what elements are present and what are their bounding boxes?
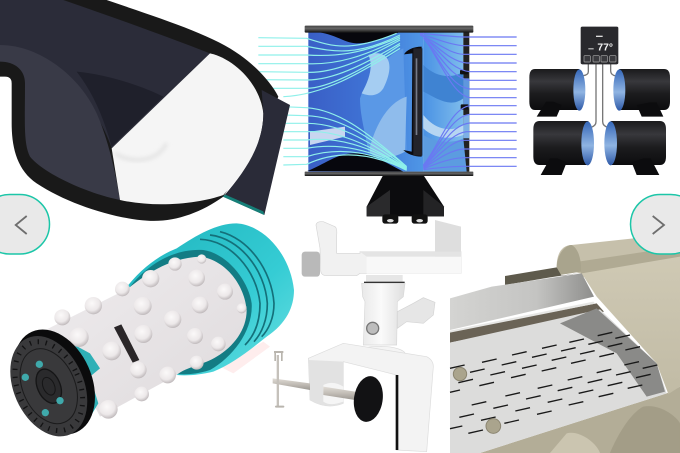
product: axial fan cutaway with airflow lines (258, 26, 517, 224)
clamp screw rod (273, 351, 355, 408)
pivot screw (367, 322, 379, 334)
dark mottled zone (560, 308, 665, 397)
white foam cup (112, 53, 263, 204)
left airflow lines (258, 33, 407, 170)
sleeve grooves (200, 232, 274, 345)
connecting cables (583, 63, 616, 128)
perforated plate (450, 309, 667, 453)
roof bolts (453, 367, 501, 433)
fan bottom right (604, 121, 666, 175)
pink reflection (220, 342, 270, 373)
black piped edge (0, 0, 278, 221)
clamp body (308, 343, 433, 452)
black knob (351, 374, 386, 424)
lower roof panel (480, 387, 680, 453)
dark mask body (0, 0, 210, 148)
teal trim (223, 195, 264, 215)
slot (114, 324, 139, 363)
product: metal roof vent detail (450, 233, 680, 453)
chevron right (653, 216, 664, 234)
mounting bracket (367, 176, 444, 224)
sleeve opening (130, 250, 252, 374)
pivot column (353, 275, 435, 362)
product: white phone clamp mount (273, 220, 461, 452)
end disk (0, 317, 111, 449)
product: sleep eye mask (0, 0, 290, 221)
fan panel interior (307, 32, 469, 172)
left lobe (0, 45, 120, 200)
teal sleeve (128, 223, 294, 375)
phone holder (302, 220, 461, 277)
foam shading (115, 143, 167, 160)
nav button: previous (0, 194, 50, 254)
disk teal dots (22, 361, 64, 416)
fan top right (613, 69, 670, 117)
white cylinder (47, 257, 247, 417)
product: four fans with thermostat controller (529, 27, 670, 175)
teal collar (50, 332, 100, 420)
inner shadow (77, 72, 163, 147)
buttons (584, 56, 616, 62)
dark channel (450, 303, 604, 343)
thermostat (581, 27, 618, 64)
cylinder bumps (54, 254, 247, 419)
fan bottom left (533, 121, 594, 175)
temperature reading: 77° (597, 42, 613, 53)
product: massage roller with teal cap (0, 223, 294, 449)
galvanized strip (450, 273, 594, 330)
right airflow lines (420, 33, 517, 170)
rolled ridge cap (557, 233, 680, 280)
nav button: next (630, 194, 680, 254)
side strap (223, 90, 290, 215)
ventilation slots (450, 332, 657, 433)
fan top left (529, 69, 585, 117)
fan frame bars (305, 26, 473, 176)
roof ribs (550, 406, 680, 453)
chevron left (16, 216, 27, 234)
